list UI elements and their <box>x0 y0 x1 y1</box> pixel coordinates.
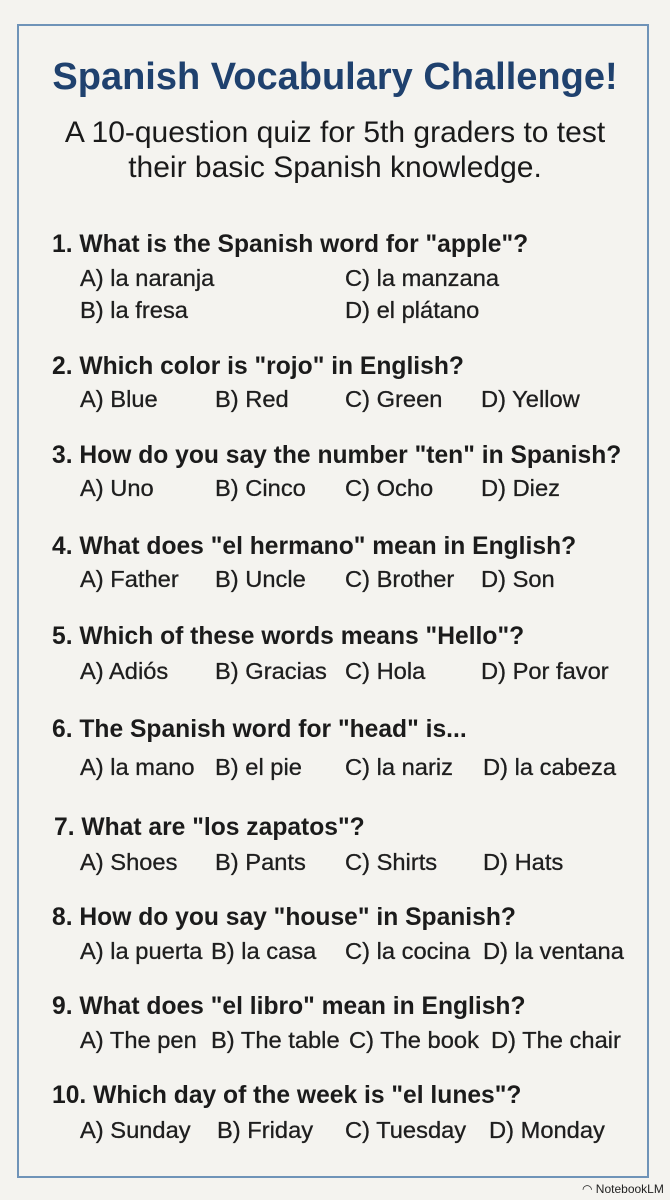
q7 options: C) Shirts <box>345 849 437 875</box>
q8 options: A) la puerta <box>80 938 202 964</box>
q1 options: D) el plátano <box>345 297 479 323</box>
subtitle <box>65 116 605 184</box>
q1 options: C) la manzana <box>345 265 499 291</box>
q2 options: C) Green <box>345 386 442 412</box>
q3 options: C) Ocho <box>345 475 433 501</box>
q6 options: A) la mano <box>80 754 195 780</box>
q6 options <box>80 754 616 780</box>
q5 options: C) Hola <box>345 658 425 684</box>
q5 options: D) Por favor <box>481 658 609 684</box>
q6 options: C) la nariz <box>345 754 453 780</box>
q9 options: B) The table <box>211 1027 340 1053</box>
q9 options: A) The pen <box>80 1027 197 1053</box>
q6 options: D) la cabeza <box>483 754 616 780</box>
q7 options: D) Hats <box>483 849 563 875</box>
q8 options: C) la cocina <box>345 938 470 964</box>
q3 options <box>80 475 560 502</box>
question 4: 4. What does "el hermano" mean in English? <box>52 532 576 560</box>
question 7: 7. What are "los zapatos"? <box>54 813 365 841</box>
q4 options: B) Uncle <box>215 566 306 592</box>
q10 options: C) Tuesday <box>345 1117 466 1143</box>
q7 options: B) Pants <box>215 849 306 875</box>
q5 options: A) Adiós <box>80 658 168 684</box>
question 3: 3. How do you say the number "ten" in Spanish? <box>52 441 621 469</box>
q4 options: A) Father <box>80 566 179 592</box>
question 6: 6. The Spanish word for "head" is... <box>52 715 467 743</box>
question 8: 8. How do you say "house" in Spanish? <box>52 903 516 931</box>
q8 options: B) la casa <box>211 938 316 964</box>
q1 options: B) la fresa <box>80 297 188 323</box>
q8 options: D) la ventana <box>483 938 624 964</box>
q2 options <box>80 386 580 412</box>
q4 options <box>80 566 555 592</box>
question 10: 10. Which day of the week is "el lunes"? <box>52 1081 521 1109</box>
q10 options: B) Friday <box>217 1117 313 1143</box>
q1 options <box>80 265 500 324</box>
q6 options: B) el pie <box>215 754 302 780</box>
q10 options <box>80 1117 605 1144</box>
question 1: 1. What is the Spanish word for "apple"? <box>52 230 528 258</box>
q3 options: A) Uno <box>80 475 154 501</box>
q1 options: A) la naranja <box>80 265 214 291</box>
question 5: 5. Which of these words means "Hello"? <box>52 622 524 650</box>
subtitle: A 10-question quiz for 5th graders to test <box>65 116 605 149</box>
q9 options: D) The chair <box>491 1027 621 1053</box>
q7 options: A) Shoes <box>80 849 177 875</box>
q10 options: A) Sunday <box>80 1117 191 1143</box>
question 9: 9. What does "el libro" mean in English? <box>52 992 526 1020</box>
question 2: 2. Which color is "rojo" in English? <box>52 352 464 380</box>
q5 options <box>80 658 609 684</box>
q7 options <box>80 849 563 876</box>
q5 options: B) Gracias <box>215 658 327 684</box>
q9 options <box>80 1027 621 1054</box>
logo: NotebookLM: ◠ NotebookLM <box>582 1182 664 1196</box>
q3 options: D) Diez <box>481 475 560 501</box>
q10 options: D) Monday <box>489 1117 605 1143</box>
q4 options: D) Son <box>481 566 555 592</box>
q9 options: C) The book <box>349 1027 479 1053</box>
q2 options: A) Blue <box>80 386 158 412</box>
q3 options: B) Cinco <box>215 475 306 501</box>
title: Spanish Vocabulary Challenge! <box>52 56 618 98</box>
q8 options <box>80 938 624 964</box>
q2 options: B) Red <box>215 386 289 412</box>
subtitle: their basic Spanish knowledge. <box>128 151 542 184</box>
q2 options: D) Yellow <box>481 386 580 412</box>
q4 options: C) Brother <box>345 566 454 592</box>
